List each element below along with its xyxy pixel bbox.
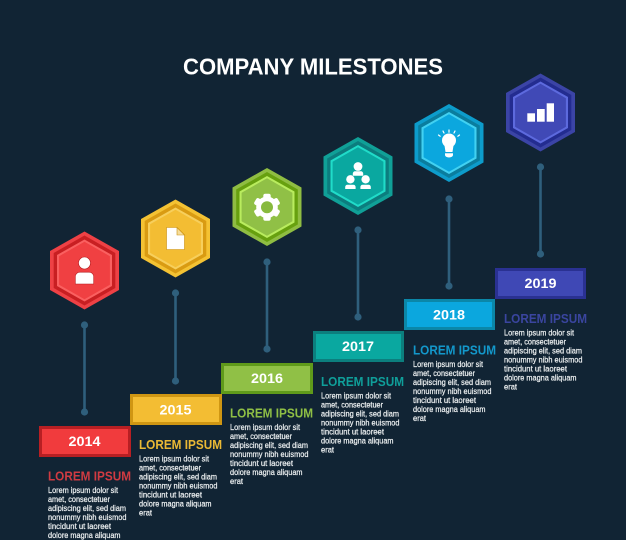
icon: document	[166, 228, 184, 250]
text block: 2019: nonummy nibh euismod	[504, 355, 583, 365]
text block: 2017: adipiscing elit, sed diam	[321, 409, 399, 419]
text block: 2014: Lorem ipsum dolor sit	[48, 485, 119, 495]
year box: 2018	[406, 300, 494, 328]
text block: 2017: Lorem ipsum dolor sit	[321, 390, 392, 400]
text block: 2015: nonummy nibh euismod	[139, 481, 218, 491]
hexagon icon: 2017 team	[324, 137, 392, 215]
text block: 2017: nonummy nibh euismod	[321, 418, 400, 428]
text block: 2018	[413, 344, 496, 423]
text block: 2016: Lorem ipsum dolor sit	[230, 422, 301, 432]
year box: 2016	[222, 364, 312, 392]
icon: light bulb	[438, 130, 460, 158]
text block: 2018: tincidunt ut laoreet	[413, 395, 477, 405]
text block: 2014: nonummy nibh euismod	[48, 512, 127, 522]
text block: 2018: Lorem ipsum dolor sit	[413, 359, 484, 369]
title: COMPANY MILESTONES	[183, 54, 443, 80]
text block: 2018: LOREM IPSUM	[413, 344, 496, 358]
hexagon icon: 2018 light bulb	[414, 104, 484, 182]
text block: 2019: erat	[504, 382, 518, 392]
hexagon icon: 2019 bar chart	[506, 74, 575, 152]
text block: 2016: dolore magna aliquam	[230, 467, 303, 477]
connector: 2016	[263, 258, 271, 353]
text block: 2015	[139, 438, 222, 518]
year box: 2015	[132, 396, 220, 424]
hexagon icon: 2015 document	[141, 200, 210, 278]
connector: 2018	[445, 195, 453, 290]
text block: 2017: tincidunt ut laoreet	[321, 427, 385, 437]
text block: 2019: tincidunt ut laoreet	[504, 364, 568, 374]
text block: 2016: amet, consectetuer	[230, 431, 292, 441]
connector: 2019	[537, 163, 544, 258]
text block: 2018: dolore magna aliquam	[413, 404, 486, 414]
hexagon icon: 2016 gear	[232, 168, 302, 246]
icon: person	[75, 257, 94, 284]
text block: 2017: amet, consectetuer	[321, 400, 383, 410]
text block: 2016	[230, 406, 313, 486]
text block: 2019: amet, consectetuer	[504, 336, 566, 346]
text block: 2016: nonummy nibh euismod	[230, 449, 309, 459]
text block: 2017: LOREM IPSUM	[321, 375, 404, 389]
text block: 2015: tincidunt ut laoreet	[139, 490, 203, 500]
text block: 2018: adipiscing elit, sed diam	[413, 377, 491, 387]
year box: 2017	[314, 332, 402, 360]
year box: 2016: 2016	[251, 370, 283, 386]
connector: 2014	[81, 321, 88, 416]
text block: 2014: adipiscing elit, sed diam	[48, 503, 126, 513]
year box: 2015: 2015	[160, 402, 192, 418]
connector: 2015	[172, 289, 179, 385]
text block: 2015: erat	[139, 508, 153, 518]
text block: 2017	[321, 375, 404, 455]
text block: 2018: amet, consectetuer	[413, 368, 475, 378]
connector: 2017	[354, 226, 362, 321]
text block: 2014	[48, 470, 131, 540]
icon: team	[345, 162, 371, 189]
text block: 2016: tincidunt ut laoreet	[230, 458, 294, 468]
text block: 2019: LOREM IPSUM	[504, 312, 587, 326]
year box: 2014	[40, 428, 130, 456]
text block: 2014: amet, consectetuer	[48, 494, 110, 504]
text block: 2019: dolore magna aliquam	[504, 373, 577, 383]
year box: 2017: 2017	[342, 338, 374, 354]
year box: 2014: 2014	[68, 433, 101, 449]
icon: bar chart	[527, 103, 554, 122]
hexagon icon: 2014 person	[50, 232, 119, 310]
icon: gear	[253, 194, 281, 221]
text block: 2017: erat	[321, 445, 335, 455]
text block: 2015: dolore magna aliquam	[139, 499, 212, 509]
text block: 2014: LOREM IPSUM	[48, 470, 131, 484]
text block: 2018: erat	[413, 413, 427, 423]
text block: 2014: tincidunt ut laoreet	[48, 521, 112, 531]
text block: 2019	[504, 312, 587, 392]
year box: 2019	[496, 270, 584, 298]
text block: 2018: nonummy nibh euismod	[413, 386, 492, 396]
text block: 2015: LOREM IPSUM	[139, 438, 222, 452]
text block: 2019: adipiscing elit, sed diam	[504, 346, 582, 356]
text block: 2015: amet, consectetuer	[139, 462, 201, 472]
text block: 2016: LOREM IPSUM	[230, 406, 313, 420]
text block: 2016: erat	[230, 476, 244, 486]
text block: 2015: Lorem ipsum dolor sit	[139, 454, 210, 464]
text block: 2014: dolore magna aliquam	[48, 530, 121, 540]
text block: 2019: Lorem ipsum dolor sit	[504, 328, 575, 338]
year box: 2019: 2019	[524, 275, 557, 291]
text block: 2016: adipiscing elit, sed diam	[230, 440, 308, 450]
year box: 2018: 2018	[433, 306, 465, 322]
text block: 2017: dolore magna aliquam	[321, 436, 394, 446]
text block: 2015: adipiscing elit, sed diam	[139, 472, 217, 482]
